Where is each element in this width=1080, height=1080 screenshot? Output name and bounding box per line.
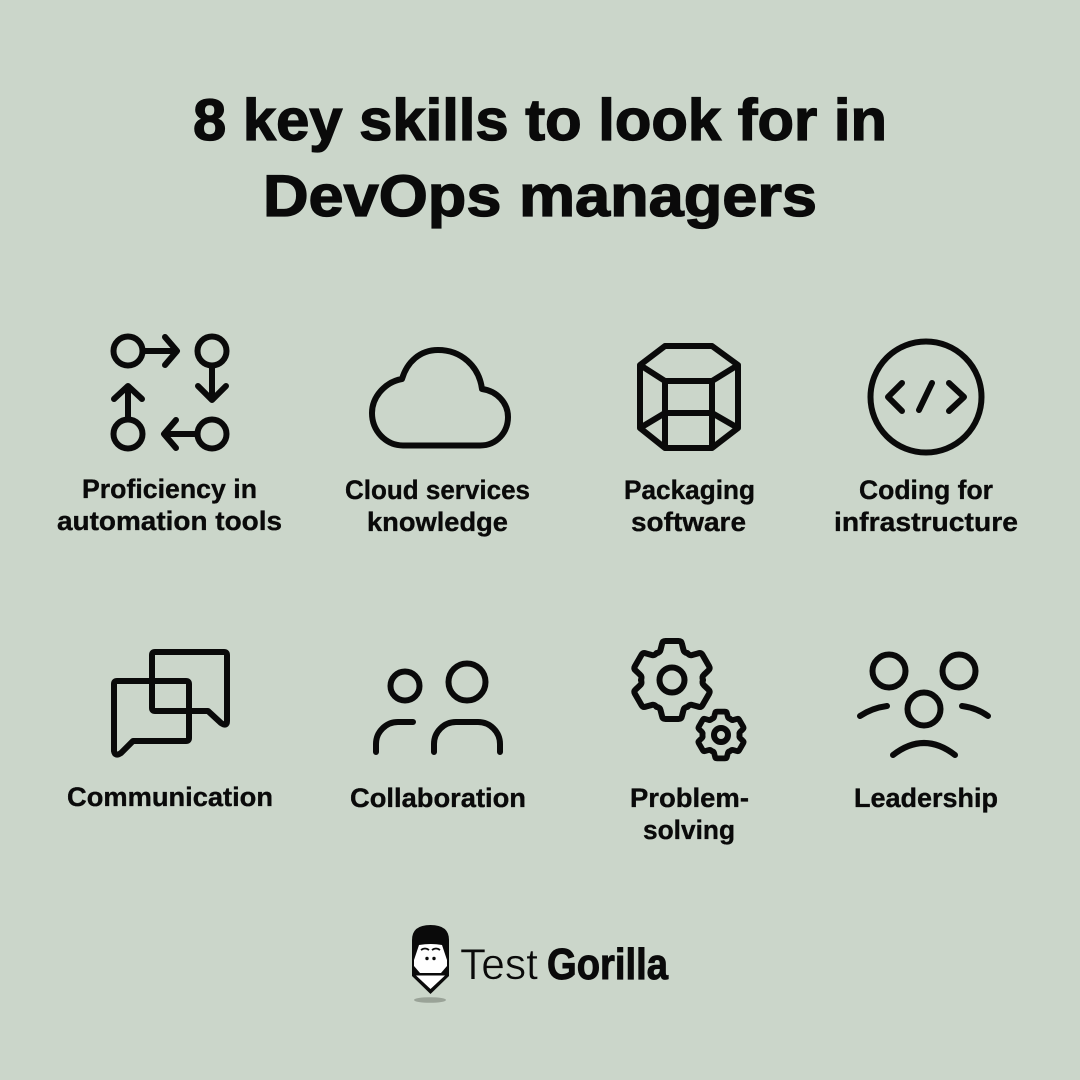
icon: group of three people xyxy=(860,654,988,755)
label: problem-solving xyxy=(630,783,749,845)
icon: cloud xyxy=(372,350,508,446)
wordmark xyxy=(460,940,668,989)
label: cloud services knowledge: knowledge xyxy=(367,507,508,537)
panel: cloud services knowledge xyxy=(345,350,530,537)
label: proficiency in automation tools xyxy=(57,474,282,536)
icon: two people xyxy=(376,664,500,752)
label: problem-solving: solving xyxy=(643,815,735,845)
label: packaging software: Packaging xyxy=(624,475,755,505)
label: coding for infrastructure xyxy=(834,475,1018,537)
wordmark: Gorilla xyxy=(547,940,668,989)
icon: automation arrows xyxy=(114,336,226,448)
panel: packaging software xyxy=(624,346,755,537)
panel: collaboration xyxy=(350,664,526,813)
panel: communication xyxy=(67,652,273,812)
label: leadership: Leadership xyxy=(854,783,998,813)
title xyxy=(193,88,887,229)
label: proficiency in automation tools: automation tools xyxy=(57,506,282,536)
panel: proficiency in automation tools xyxy=(57,336,282,536)
label: proficiency in automation tools: Proficiency in xyxy=(82,474,257,504)
label: packaging software xyxy=(624,475,755,537)
label: cloud services knowledge xyxy=(345,475,530,537)
label: collaboration: Collaboration xyxy=(350,783,526,813)
icon: gorilla pencil xyxy=(412,925,449,1003)
icon: gears xyxy=(630,641,746,758)
label: packaging software: software xyxy=(631,507,746,537)
label: communication: Communication xyxy=(67,782,273,812)
logo: TestGorilla xyxy=(412,925,668,1003)
label: coding for infrastructure: Coding for xyxy=(859,475,993,505)
title: 8 key skills to look for in xyxy=(193,88,887,153)
icon: hexagonal prism xyxy=(640,346,738,448)
panel: coding for infrastructure xyxy=(834,342,1018,537)
panel: problem-solving xyxy=(630,641,749,845)
wordmark: Test xyxy=(460,940,538,989)
label: cloud services knowledge: Cloud services xyxy=(345,475,530,505)
icon: overlapping speech bubbles xyxy=(114,652,227,755)
title: DevOps managers xyxy=(263,164,817,229)
icon: code circle xyxy=(870,342,982,452)
label: coding for infrastructure: infrastructure xyxy=(834,507,1018,537)
label: problem-solving: Problem- xyxy=(630,783,749,813)
panel: leadership xyxy=(854,654,998,813)
